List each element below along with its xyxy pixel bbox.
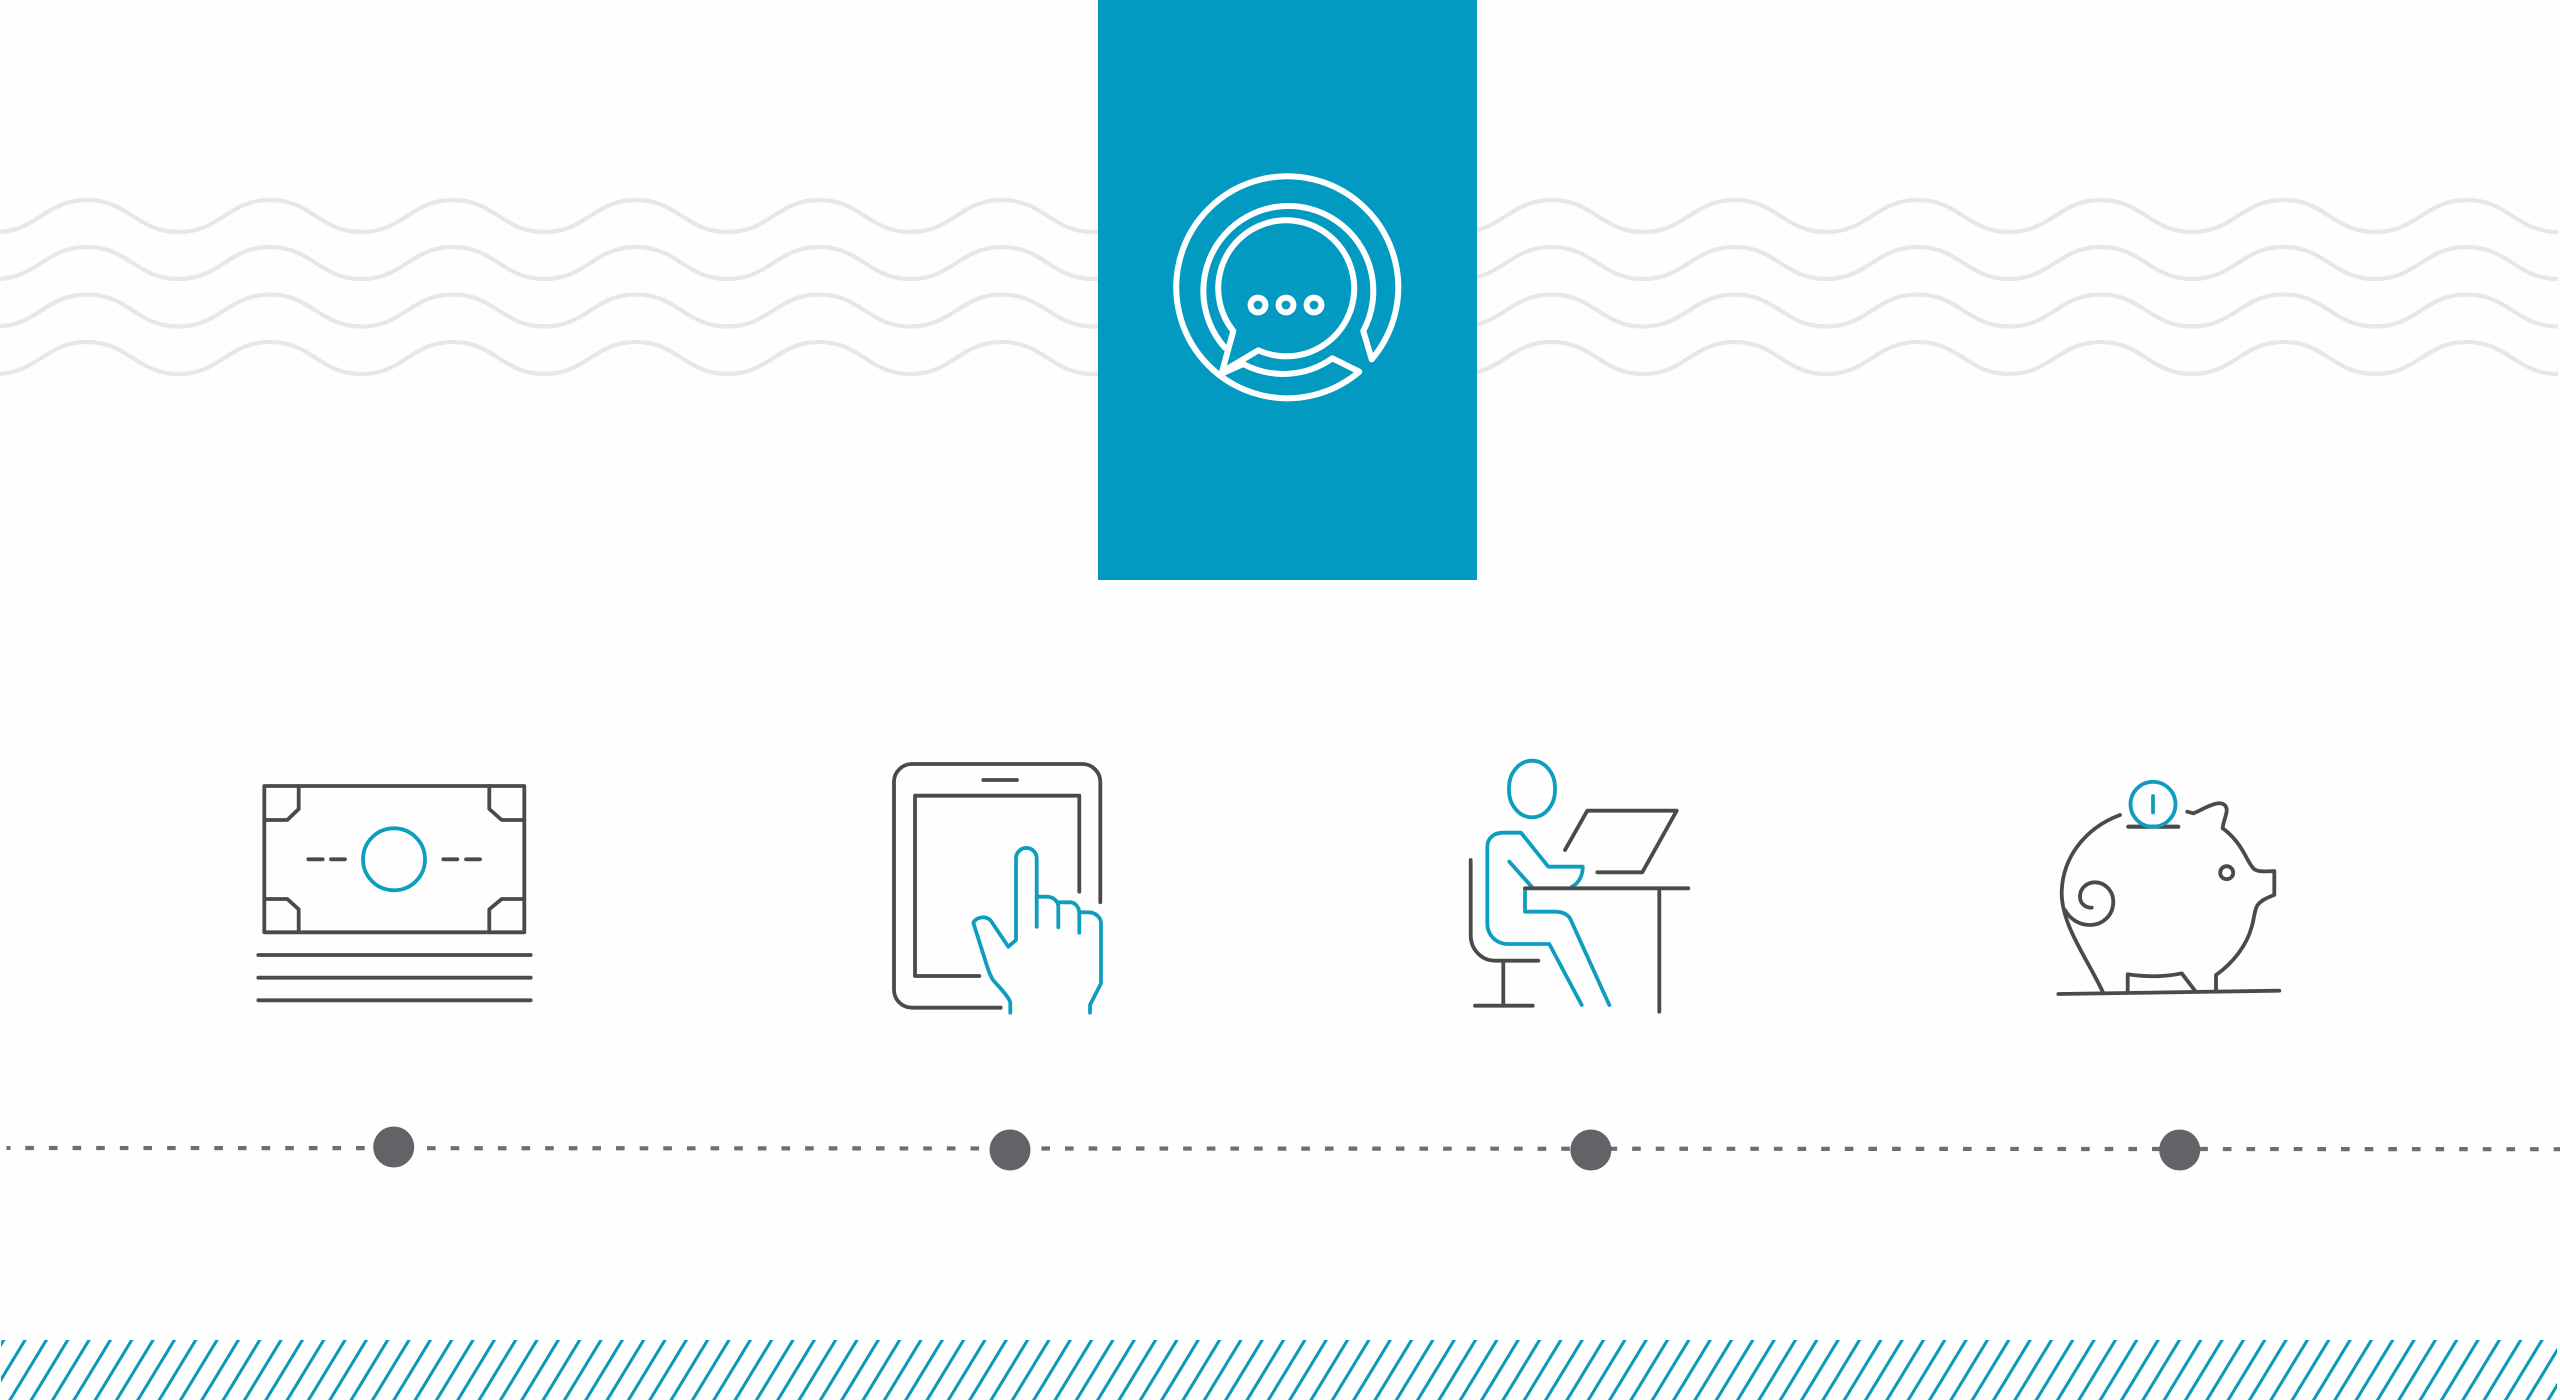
- panel: blue header block: [1098, 0, 1477, 580]
- wave pattern: right: [1460, 200, 2558, 374]
- timeline: dotted line with four nodes: [6, 1126, 2560, 1170]
- icon: piggy bank with coin: [2058, 782, 2279, 994]
- wave pattern: left: [0, 200, 1185, 374]
- icon: hand tapping a tablet: [894, 764, 1101, 1013]
- icon: circular speech bubble emblem: [1176, 176, 1398, 398]
- icon: person working at a desk: [1471, 761, 1688, 1012]
- icon: banknote stack: [258, 786, 531, 1000]
- hatched band along the bottom edge: [1, 1340, 2557, 1400]
